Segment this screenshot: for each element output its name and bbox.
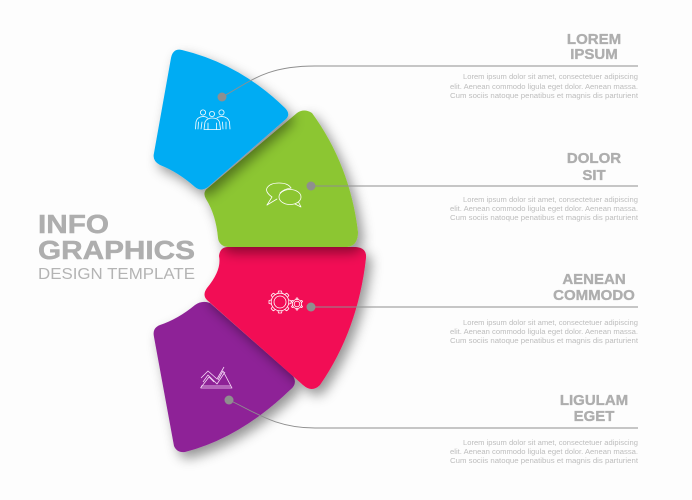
segment: red (204, 247, 366, 389)
text block 3 (450, 271, 639, 345)
text block 4 (450, 392, 639, 465)
segment: green (204, 110, 358, 247)
connector dot 2 (306, 182, 316, 190)
text block 4: Lorem ipsum dolor sit amet, consectetuer adipiscing (463, 438, 638, 447)
icon: speech bubbles (267, 183, 301, 207)
text block 2: DOLOR (567, 150, 621, 167)
title block: INFO (38, 209, 109, 239)
segment: purple (154, 302, 295, 452)
connector 2 (311, 185, 638, 187)
text block 4: Cum sociis natoque penatibus et magnis dis parturient (450, 456, 639, 465)
text block 3: AENEAN (562, 271, 626, 288)
title block: GRAPHICS (38, 235, 195, 265)
text block 1 (450, 31, 639, 100)
connector 1 (222, 66, 638, 97)
text block 1: LOREM (567, 31, 621, 48)
text block 3: Cum sociis natoque penatibus et magnis dis parturient (450, 336, 639, 345)
text block 4: LIGULAM (560, 392, 628, 409)
text block 3: COMMODO (553, 287, 635, 304)
text block 3: Lorem ipsum dolor sit amet, consectetuer adipiscing (463, 318, 638, 327)
text block 1: Lorem ipsum dolor sit amet, consectetuer adipiscing (463, 72, 638, 81)
text block 4: elit. Aenean commodo ligula eget dolor. Aenean massa. (450, 447, 638, 456)
text block 2: SIT (582, 167, 606, 184)
icon: gears (269, 291, 303, 313)
text block 4: EGET (574, 408, 614, 425)
text block 2 (450, 150, 639, 222)
connector dot 3 (306, 302, 316, 312)
text block 1: IPSUM (570, 46, 618, 63)
connector dot 1 (218, 92, 226, 102)
segment: blue (154, 50, 288, 189)
text block 3: elit. Aenean commodo ligula eget dolor. Aenean massa. (450, 327, 638, 336)
connector 4 (229, 400, 638, 428)
connector dot 4 (224, 396, 234, 404)
text block 1: Cum sociis natoque penatibus et magnis dis parturient (450, 91, 639, 100)
text block 2: elit. Aenean commodo ligula eget dolor. Aenean massa. (450, 204, 638, 213)
icon: chart (200, 367, 232, 388)
icon: people (196, 110, 230, 130)
text block 1: elit. Aenean commodo ligula eget dolor. Aenean massa. (450, 82, 638, 91)
connector 3 (311, 306, 638, 308)
text block 2: Lorem ipsum dolor sit amet, consectetuer adipiscing (463, 195, 638, 204)
title block (38, 209, 195, 283)
title block: DESIGN TEMPLATE (38, 266, 195, 283)
text block 2: Cum sociis natoque penatibus et magnis dis parturient (450, 213, 639, 222)
